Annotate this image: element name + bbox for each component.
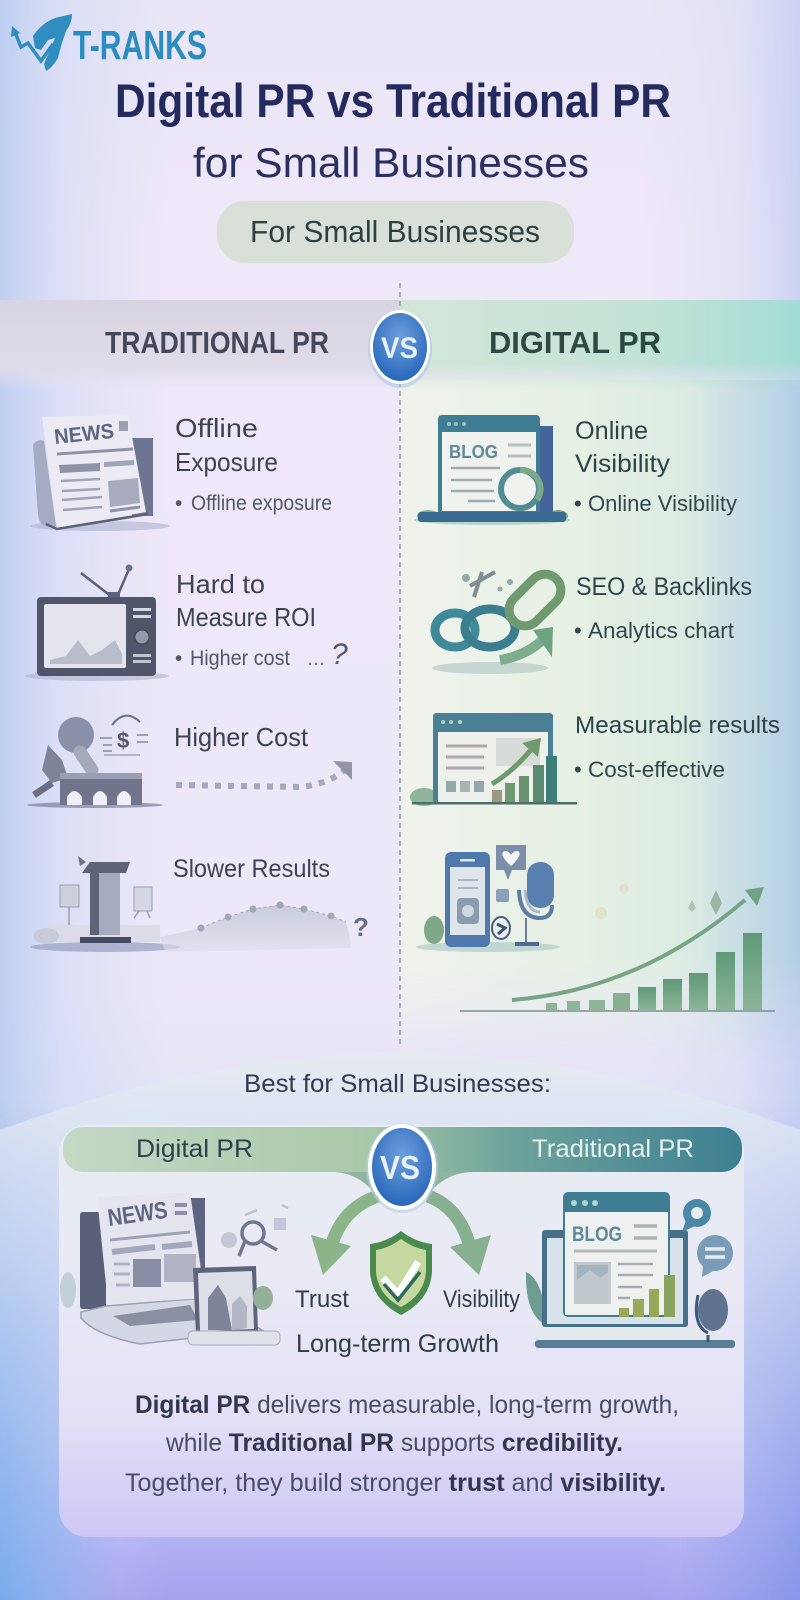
- label: Hard to: [176, 569, 265, 599]
- item: measurable results: [410, 712, 780, 806]
- icon: newspaper: [30, 415, 170, 531]
- chart: growth bars and arrow: [460, 884, 775, 1012]
- heading: Traditional PR: TRADITIONAL PR: [105, 325, 329, 360]
- label: Measurable results: [575, 712, 780, 739]
- icon: newspaper: NEWS: [53, 420, 115, 449]
- label: Online: [575, 417, 648, 445]
- label: Offline exposure: [191, 492, 332, 515]
- icon: blog laptop: [526, 1192, 735, 1348]
- label: [574, 712, 780, 782]
- icon: microphone, money and building: $: [117, 728, 129, 753]
- title: for Small Businesses: [193, 139, 589, 186]
- subtitle pill: [217, 201, 574, 263]
- comparison ribbon: Digital PR: [136, 1135, 253, 1163]
- label: [175, 413, 332, 515]
- item: SEO and backlinks: [432, 567, 752, 674]
- label: trust: Trust: [295, 1286, 349, 1313]
- label: Cost-effective: [588, 757, 725, 782]
- vs badge: VS: [381, 332, 418, 365]
- title: [115, 74, 671, 186]
- label: [175, 569, 348, 671]
- panel: summary: [59, 1070, 744, 1537]
- comparison ribbon: Traditional PR: [532, 1135, 694, 1163]
- title: Digital PR vs Traditional PR: [115, 74, 671, 127]
- logo: T-RANKS: T-RANKS: [73, 22, 207, 68]
- summary text: Digital PR delivers measurable, long-term growth,: [135, 1391, 679, 1419]
- label: •: [574, 491, 582, 516]
- heading: best for small businesses: Best for Small Businesses:: [244, 1070, 551, 1098]
- icon: podium: [30, 856, 180, 952]
- label: •: [574, 757, 582, 782]
- icon: phone and microphone: [416, 845, 560, 952]
- logo: T-RANKS: [11, 14, 207, 71]
- label: Analytics chart: [588, 618, 734, 643]
- label: Higher Cost: [174, 722, 309, 752]
- label: Visibility: [575, 450, 671, 478]
- label: Slower Results: [173, 855, 330, 883]
- vs badge: [366, 1123, 438, 1213]
- arrow: to visibility: [428, 1196, 491, 1275]
- label: •: [574, 618, 582, 643]
- vs badge: VS: [380, 1149, 420, 1186]
- label: Offline: [175, 413, 258, 443]
- item: slower results: [30, 855, 369, 952]
- icon: news laptop: [60, 1192, 288, 1345]
- icon: television: [25, 564, 169, 681]
- icon: blog window: [414, 415, 570, 525]
- line chart with question mark: ?: [353, 912, 369, 942]
- label: ?: [331, 638, 348, 671]
- label: Measure ROI: [176, 602, 316, 632]
- arrow: to trust: [311, 1196, 378, 1275]
- icon: blog window: BLOG: [449, 442, 498, 462]
- summary text: [125, 1391, 679, 1497]
- heading: Digital PR: DIGITAL PR: [489, 325, 661, 360]
- vs badge: [368, 310, 432, 388]
- label: visibility: Visibility: [443, 1286, 520, 1313]
- bottom dome background: [0, 1052, 800, 1600]
- label: Higher cost: [190, 647, 290, 670]
- label: ...: [307, 647, 325, 670]
- icon: blog laptop: BLOG: [572, 1223, 622, 1246]
- label: •: [175, 647, 182, 670]
- label: [574, 417, 737, 516]
- label: •: [175, 492, 182, 515]
- panel: traditional PR: [25, 413, 369, 952]
- item: hard to measure ROI: [25, 564, 348, 681]
- item: higher cost: [27, 716, 352, 808]
- icon: news laptop: NEWS: [106, 1197, 169, 1232]
- summary text: Together, they build stronger trust and visibility.: [125, 1469, 666, 1497]
- label: SEO & Backlinks: [576, 573, 752, 601]
- icon: chain links with arrow: [432, 567, 568, 674]
- icon: microphone, money and building: [27, 716, 163, 808]
- icon: dashboard window with bars: [410, 713, 577, 806]
- item: offline exposure: [30, 413, 332, 531]
- icon: shield: [370, 1231, 432, 1315]
- label: long-term growth: Long-term Growth: [296, 1330, 499, 1358]
- line chart with question mark: [160, 902, 369, 952]
- label: Online Visibility: [588, 491, 737, 516]
- comparison ribbon: [63, 1127, 742, 1198]
- subtitle pill: For Small Businesses: [250, 214, 540, 249]
- item: social and growth: [416, 845, 775, 1012]
- item: online visibility: [414, 415, 737, 525]
- dotted arrow: [176, 761, 352, 787]
- label: [574, 573, 752, 643]
- panel: digital PR: [410, 415, 780, 1012]
- label: Exposure: [175, 447, 278, 477]
- summary text: while Traditional PR supports credibility.: [165, 1429, 623, 1457]
